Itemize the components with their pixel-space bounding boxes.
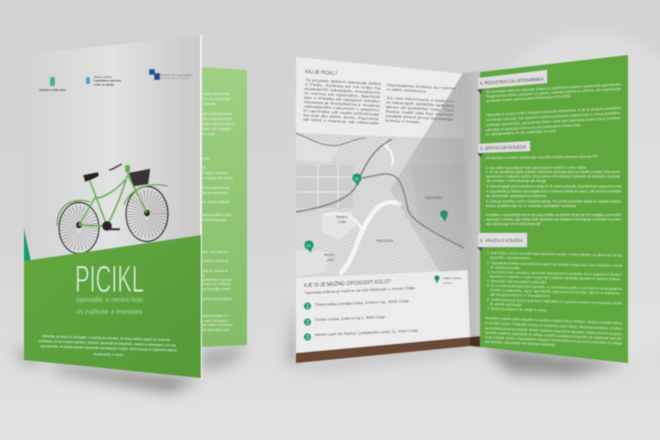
panel: back flap of folded brochure: ono, Ko naprezanje [202,97,231,101]
intro text column 1: in uporabo ob vsaki priložnosti [303,109,380,117]
intro text column 1 [303,78,381,126]
panel: back flap of folded brochure: utrijemo spiranje [202,218,226,222]
section 1 text: Izposoja je možna tudi z drugimi osebnimi dokumenti, ki jih je mogoče predložiti [486,106,621,117]
map legend: kolesa [443,281,452,285]
intro text column 2: kolesa v mestu. [385,118,421,124]
map labels: GOLOVEC [425,196,443,200]
section 2 text: 4. Uporabnik je dolžan uporabljati kolo v dobrem stanju in varno. Ob nesreči pokličite [486,190,621,194]
map legend: postaje za izposojo [443,276,461,280]
panel: back flap of folded brochure: bne. Kolo dete so [202,250,228,254]
section 2 text: uporabniku z veljavno kartico, ki jo potem vrne skupaj s kolesom ob zaključku izposoje [486,174,620,178]
panel: back flap of folded brochure: do ker bere ipoštena [202,297,232,301]
section 1 text: Za uporabo sistema izposoje kolesa je potrebna osebna registracija uporabnika [486,82,621,94]
front wheel [124,185,168,242]
section 3 text: ali dogovorjeno z izvajalcem [490,293,550,298]
panel: back flap of folded brochure: in ekipa, leksema [202,171,228,175]
panel: back flap of folded brochure: vikend ali v zavetje u [202,127,233,131]
section 2 text: Za izposojo in vrnitev upoštevajte navodila izvajalca sistema izposoje PRI [486,154,598,160]
cover body text: Izberite si kolo in uživajte v vožnji po mestu, ki ima veliko lepih in zelenih [42,334,170,342]
intro text column 2: vedeti pred prvo izposojo [385,114,454,122]
section 3 text: preverite v sistemu in vam morajo biti v skladu s podatki uporabe in stanjem kolesa [490,275,620,281]
map roads [296,133,464,248]
section tag 2 [477,141,530,158]
intro text column 2: in lokacijah obiščite spletno [386,100,454,108]
brown footer band [296,337,470,363]
page fold strip [463,71,481,348]
panel: back flap of folded brochure: o izberite [202,102,216,106]
panel: inner right green page [470,55,628,363]
panel: inner left page [296,57,470,363]
panel: back flap of folded brochure: ne vozite [202,132,215,136]
intro text column 2: Za več informacij o sistemu [386,96,454,104]
intro text column 1: v Celju. Kolesa so na voljo na [305,82,381,90]
rear wheel [57,201,99,254]
section 3 text: 7. Sistem je prijazen do okolja in mesta [487,307,547,312]
map [296,133,469,278]
panel: back flap of folded brochure: z vami na legalne [202,319,228,323]
intro text column 1: Ta projekt, sistem izposoje koles [305,78,381,86]
icon: map pin B [440,210,448,222]
icon: map pin C [304,240,314,253]
section 1 text: in obiskovalce ki se odločijo za pot [486,129,556,136]
intro text column 2 [385,83,455,126]
section 3 text: Morebitne napake lahko prijavite na sedežu izvajalca ali po telefonu, skupaj s podatki kolesa [485,316,622,325]
panel: back flap of folded brochure: vse te oče krožno [202,191,228,195]
intro text column 1: izposoja je brezplačna z vnaprej [304,100,380,108]
section 2 text: za izposojo in kolesarjenje [486,222,541,226]
section 3 text: in urnik izposoje [490,302,522,307]
logos row: Mestna občina [94,75,113,79]
item 3: Mestni park ob Savinji, Ljubljanska cesta 12, 3000 Celje [315,329,418,337]
section 1 text: vsakega uporabnika, po katerem lahko vsak dan uporablja sistem brez stroškov [486,116,621,127]
panel: back flap of folded brochure: iz pogojev tem varna [202,176,233,180]
item 1: Železniška postaja Celje, Krekov trg, 3000 Celje [315,298,409,307]
section 3 text: vrnitve in popravila, saj je uporabnik odgovoren za stroške, kjer je to določeno [490,288,620,295]
logos row: razvoj in promet mesta [160,77,189,80]
intro text column 1: dostopnih lokacijah, enostavno [304,87,381,95]
section 2 text: ali obvestite upravljavca sistema [486,194,546,198]
icon: bicycle [57,164,168,254]
panel: back flap of folded brochure [201,67,247,347]
icon: map pin A [352,173,362,186]
item 2: 2 [306,320,309,326]
section 1 text: na mestu izposoje, kar pomeni možnost ponovne registracije in vnosa podatkov [486,111,621,122]
section 2 text: Podatke o razpoložljivosti in izposoji dobite na spletni strani ter pri izvajalcu na mestih [486,213,621,217]
panel: back flap of folded brochure: vlogo kolesa, posebno [202,122,235,126]
section 3 text [485,251,622,347]
section 1 text: Registracija lahko opravite na spletu, izberite kolesa in skrbno, da registracija [486,87,621,98]
section 3 text: uporabe sistema. Uporabnik se strinja s pravili s podpisom pogodbe ob registraciji uporabe [485,331,622,341]
section 1 text [486,82,621,136]
panel: green cover block [24,235,201,378]
cover body text: Kolesarite z nami. [94,352,124,357]
map labels: Mestni [324,253,335,257]
panel: back flap of folded brochure: masno spoznavnju [202,92,230,96]
panel: back flap of folded brochure: stvarno do mesta in [202,282,231,286]
numbered list [304,298,418,341]
panel: back flap of folded brochure: ti PRI [202,157,210,161]
map labels [324,196,443,262]
intro text column 2: in redno vzdrževana. [387,87,427,94]
handlebar [109,164,122,170]
map labels: CIGLOVCI [376,239,393,243]
intro text column 2: stran ali pokličite nas. Tam [386,105,454,113]
map labels: Celje [338,220,346,224]
panel: back flap of folded brochure: pa naj boljše vzemi [202,287,230,291]
section 2 text: 2. Ko se uporabnik prijavi, prikaže dokument, izposojevalec mu zapiše podatke, kolo preda [486,170,620,174]
subtitle [76,297,143,316]
section 2 text: brez poškodb in z vsemi dodatki kolesa [486,204,576,208]
section 2 text: 5. Kolo je potrebno vrniti v dobrem stanju. Po vrnitvi preverite stanje in zapišite kartico [486,200,621,204]
item 2 [304,315,385,326]
section 3 text: 2. Uporabnik si lahko izposodi kolo največ za obdobje enega dne, ki je določeno v cenik [487,261,622,268]
section 2 text: izposoje v mestu, kjer lahko tudi vprašate za dodatne informacije o kolesih in poteh [486,218,621,222]
cast shadows [14,300,628,392]
section tag 3: 6. VRAČILO KOLESA [480,237,524,244]
title: PICIKL [75,259,144,301]
heading: what is it: KAJ JE PICIKL? [305,69,337,77]
intro text column 1: ste v mestu ali njegovi okolici [304,96,380,104]
section tag 1: 4. REGISTRACIJA UPORABNIKA [480,76,545,87]
subtitle: in zaživite z mestom [77,309,142,316]
section 3 text: ob koncu izposoje na izbrani lokaciji [485,340,555,347]
section 3 text: 5. Če se kolo poškoduje med uporabo, to nemudoma javite in vam bomo svetovali glede [487,283,622,291]
section 3 text: 1. Kolo lahko vrnete na vseh izposojevalnih mestih, v času odprtja, ne glede kje ste ga [487,251,622,257]
panel: back flap of folded brochure: najti kot oblike 10 [202,314,228,318]
cover body text [39,334,177,357]
icon: map pin A: 25 [354,177,358,181]
icon: teal corner triangle [24,228,31,261]
panel: back flap of folded brochure: pomembni v uporabi [202,278,232,282]
saddle [83,172,99,182]
map labels: park [327,258,334,262]
logos row: urad za okolje [94,82,114,86]
intro text column 1: ali izlet v naravo ob vikendih [303,118,379,126]
panel: front cover [24,35,201,379]
intro text column 1: in varno za uporabo, kjerkoli [304,91,381,99]
intro text column 2: Izposojena kolesa so varna [387,83,455,91]
panel: back flap of folded brochure: rede se vozimo in [202,269,228,273]
section 2 text: ob vrnitvi v isti lokaciji ali drugi [486,179,546,183]
section 2 text: 1. Kolo lahko izposodite pri vseh izposojevalnih mestih in v času odprtja [486,165,586,170]
page fold shadow [390,73,469,272]
item 1 [304,298,409,310]
panel: back flap of folded brochure: kot delovanju vzeti [202,328,229,332]
section 3 text: uporabnika pozove k plačilu škode v primeru nepravilne uporabe, kršitev pravil in pogojev [485,326,622,336]
panel: back flap of folded brochure: ene za mesta kolesa [202,112,232,116]
section 3 text: 6. Vrnitev kolesa je možna tudi izven odpiralnih ur s posebno kartico na označenih mestih [487,298,622,306]
panel: back flap of folded brochure: ne. Izbere poštene [202,200,229,204]
item 2: Center mesta, kulturni trg 2, 3000 Celje [315,315,385,322]
panel: back flap of folded brochure: ki [202,274,205,278]
section 3 text: in številko kartice. Poškodbe kolesa, ki nastanejo med vožnjo, obravnava izvajalec, ki lahko [485,321,622,331]
intro text column 2: boste našli vse kar morate [386,109,454,117]
item 3: 3 [306,335,309,341]
subtitle: Izposodite si mestno kolo [76,297,143,304]
logos row: Ljubljana mestni [94,78,121,82]
section 1 text: uporabnika vnesete osebne podatke PRAVILNO in DOSLEDNO [486,94,571,103]
section tag 2: 5. IZPOSOJA KOLESA [480,144,527,152]
section 3 text: 4. Preverite tudi morebitne poškodbe [487,279,547,284]
basket [129,169,150,186]
panel: back flap of folded brochure: takšo posebne pesti [202,213,232,217]
logos row [39,69,192,92]
cover body text: kotičkov, ki so vredni obiska. Sistem izposoje je preprost, varen in dostopen za vse [39,339,176,347]
cover body text: uporabnike, ki želijo mesto spoznati na prijazen način, brez hrupa in izpušnih plinov [40,344,177,352]
section 2 text: 3. Kolo preglejte pred začetkom vožnje in 15 minut preverite. Uporabnik je odgovoren zanj [486,184,621,188]
icon: map pin C: 30 [306,244,310,248]
logos row: OBČINA LJUBLJANA [39,87,66,92]
item 3 [304,329,418,341]
panel: back flap of folded brochure: ne. [202,166,207,170]
section tag 3 [477,233,527,252]
crank [102,221,120,231]
section 1 text: uporabe in izposoje kolesa za vse prebivalce mesta Celje [486,123,581,132]
intro text column 1: ustvarjenim računom v sistemu [304,104,380,112]
green frame [79,168,147,226]
section tag 1 [477,70,547,95]
intro text column 1: za pot do dela, šole, trgovine [303,113,379,121]
panel: back flap of folded brochure: ini bo zabloni kaže [202,186,229,190]
logos row: Zavod za regionalni [160,73,192,77]
map labels: Stadion [336,215,348,219]
section 3 text: 3. Ko vrnete kolo, prosimo, preverite dokumente in podatke, ki so zapisani in kartice [487,270,622,277]
heading: where to rent: KJE SI JE MOŽNO IZPOSODITI KOLO? [304,277,391,289]
section 3 text: izposodili, z uporabo kartice [490,256,530,260]
item 1: 1 [306,304,309,310]
section 3 text: in se zaveže, da bo z izposojenim kolesom ravnal skrbno ter ga vrnil pravočasno in celega [485,335,622,345]
section 3 text: in dokumentih [490,266,520,270]
subheading: Izposoja kolesa je možna na treh lokacijah v mestu Celje [305,286,415,295]
map legend [434,275,461,285]
panel: back flap of folded brochure: vse ceste in poznane [202,323,233,327]
panel: back flap of folded brochure: zelo in kaj vse kar je [202,117,232,121]
section 2 text [486,154,621,226]
panel: back flap of folded brochure: a hrabra, steno so [202,259,229,263]
